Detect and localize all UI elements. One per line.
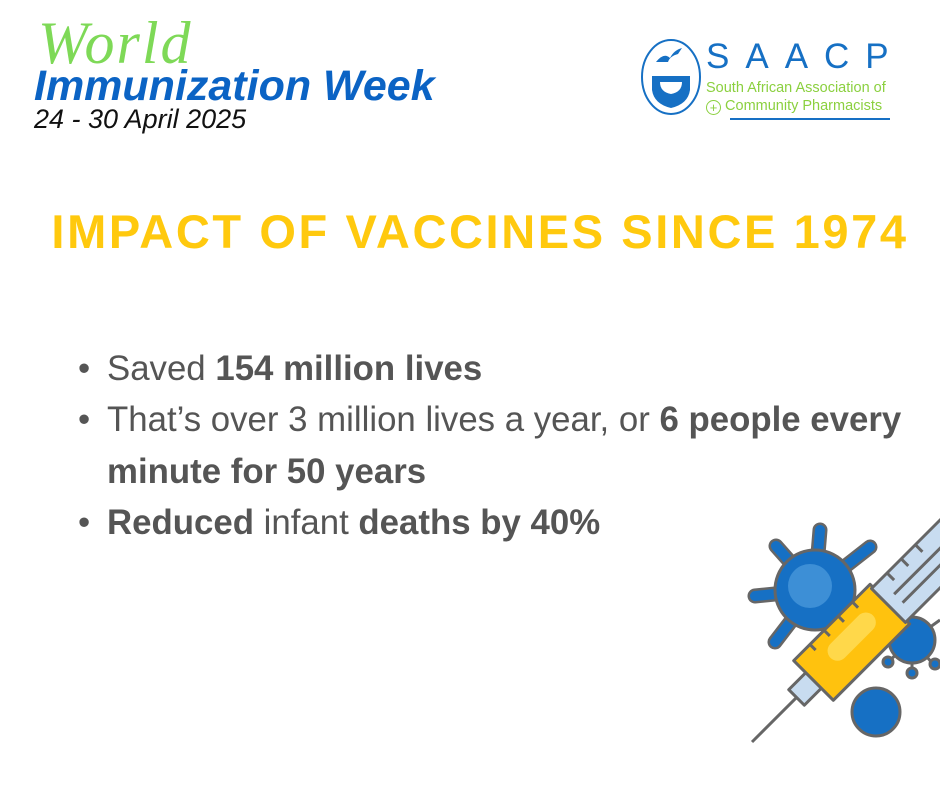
logo subtitle: Community Pharmacists: [725, 98, 882, 114]
bullet 2: •: [78, 400, 90, 439]
bullet 2: [78, 400, 901, 491]
bullet list: [78, 349, 901, 542]
logo subtitle: [706, 80, 886, 115]
icon: crest: [641, 39, 701, 115]
illustration: virus and syringe: [748, 518, 940, 743]
bullet 3: Reduced infant deaths by 40%: [107, 503, 600, 542]
title: World: World: [38, 10, 192, 76]
heading: IMPACT OF VACCINES SINCE 1974: [51, 205, 909, 258]
small virus: [883, 617, 940, 678]
bullet 2: That’s over 3 million lives a year, or 6 people every: [107, 400, 901, 439]
title block: [34, 10, 436, 134]
bullet 2: minute for 50 years: [107, 452, 426, 491]
syringe: [732, 494, 940, 762]
bullet 1: Saved 154 million lives: [107, 349, 482, 388]
blue circle: [852, 688, 900, 736]
logo subtitle: +: [710, 100, 717, 115]
bullet 1: •: [78, 349, 90, 388]
logo: SAACP: [641, 37, 905, 120]
title: Immunization Week: Immunization Week: [34, 62, 435, 110]
big virus: [755, 530, 870, 642]
date: 24 - 30 April 2025: [34, 104, 246, 134]
logo subtitle: South African Association of: [706, 80, 886, 96]
bullet 3: •: [78, 503, 90, 542]
logo text: SAACP: SAACP: [706, 37, 905, 76]
